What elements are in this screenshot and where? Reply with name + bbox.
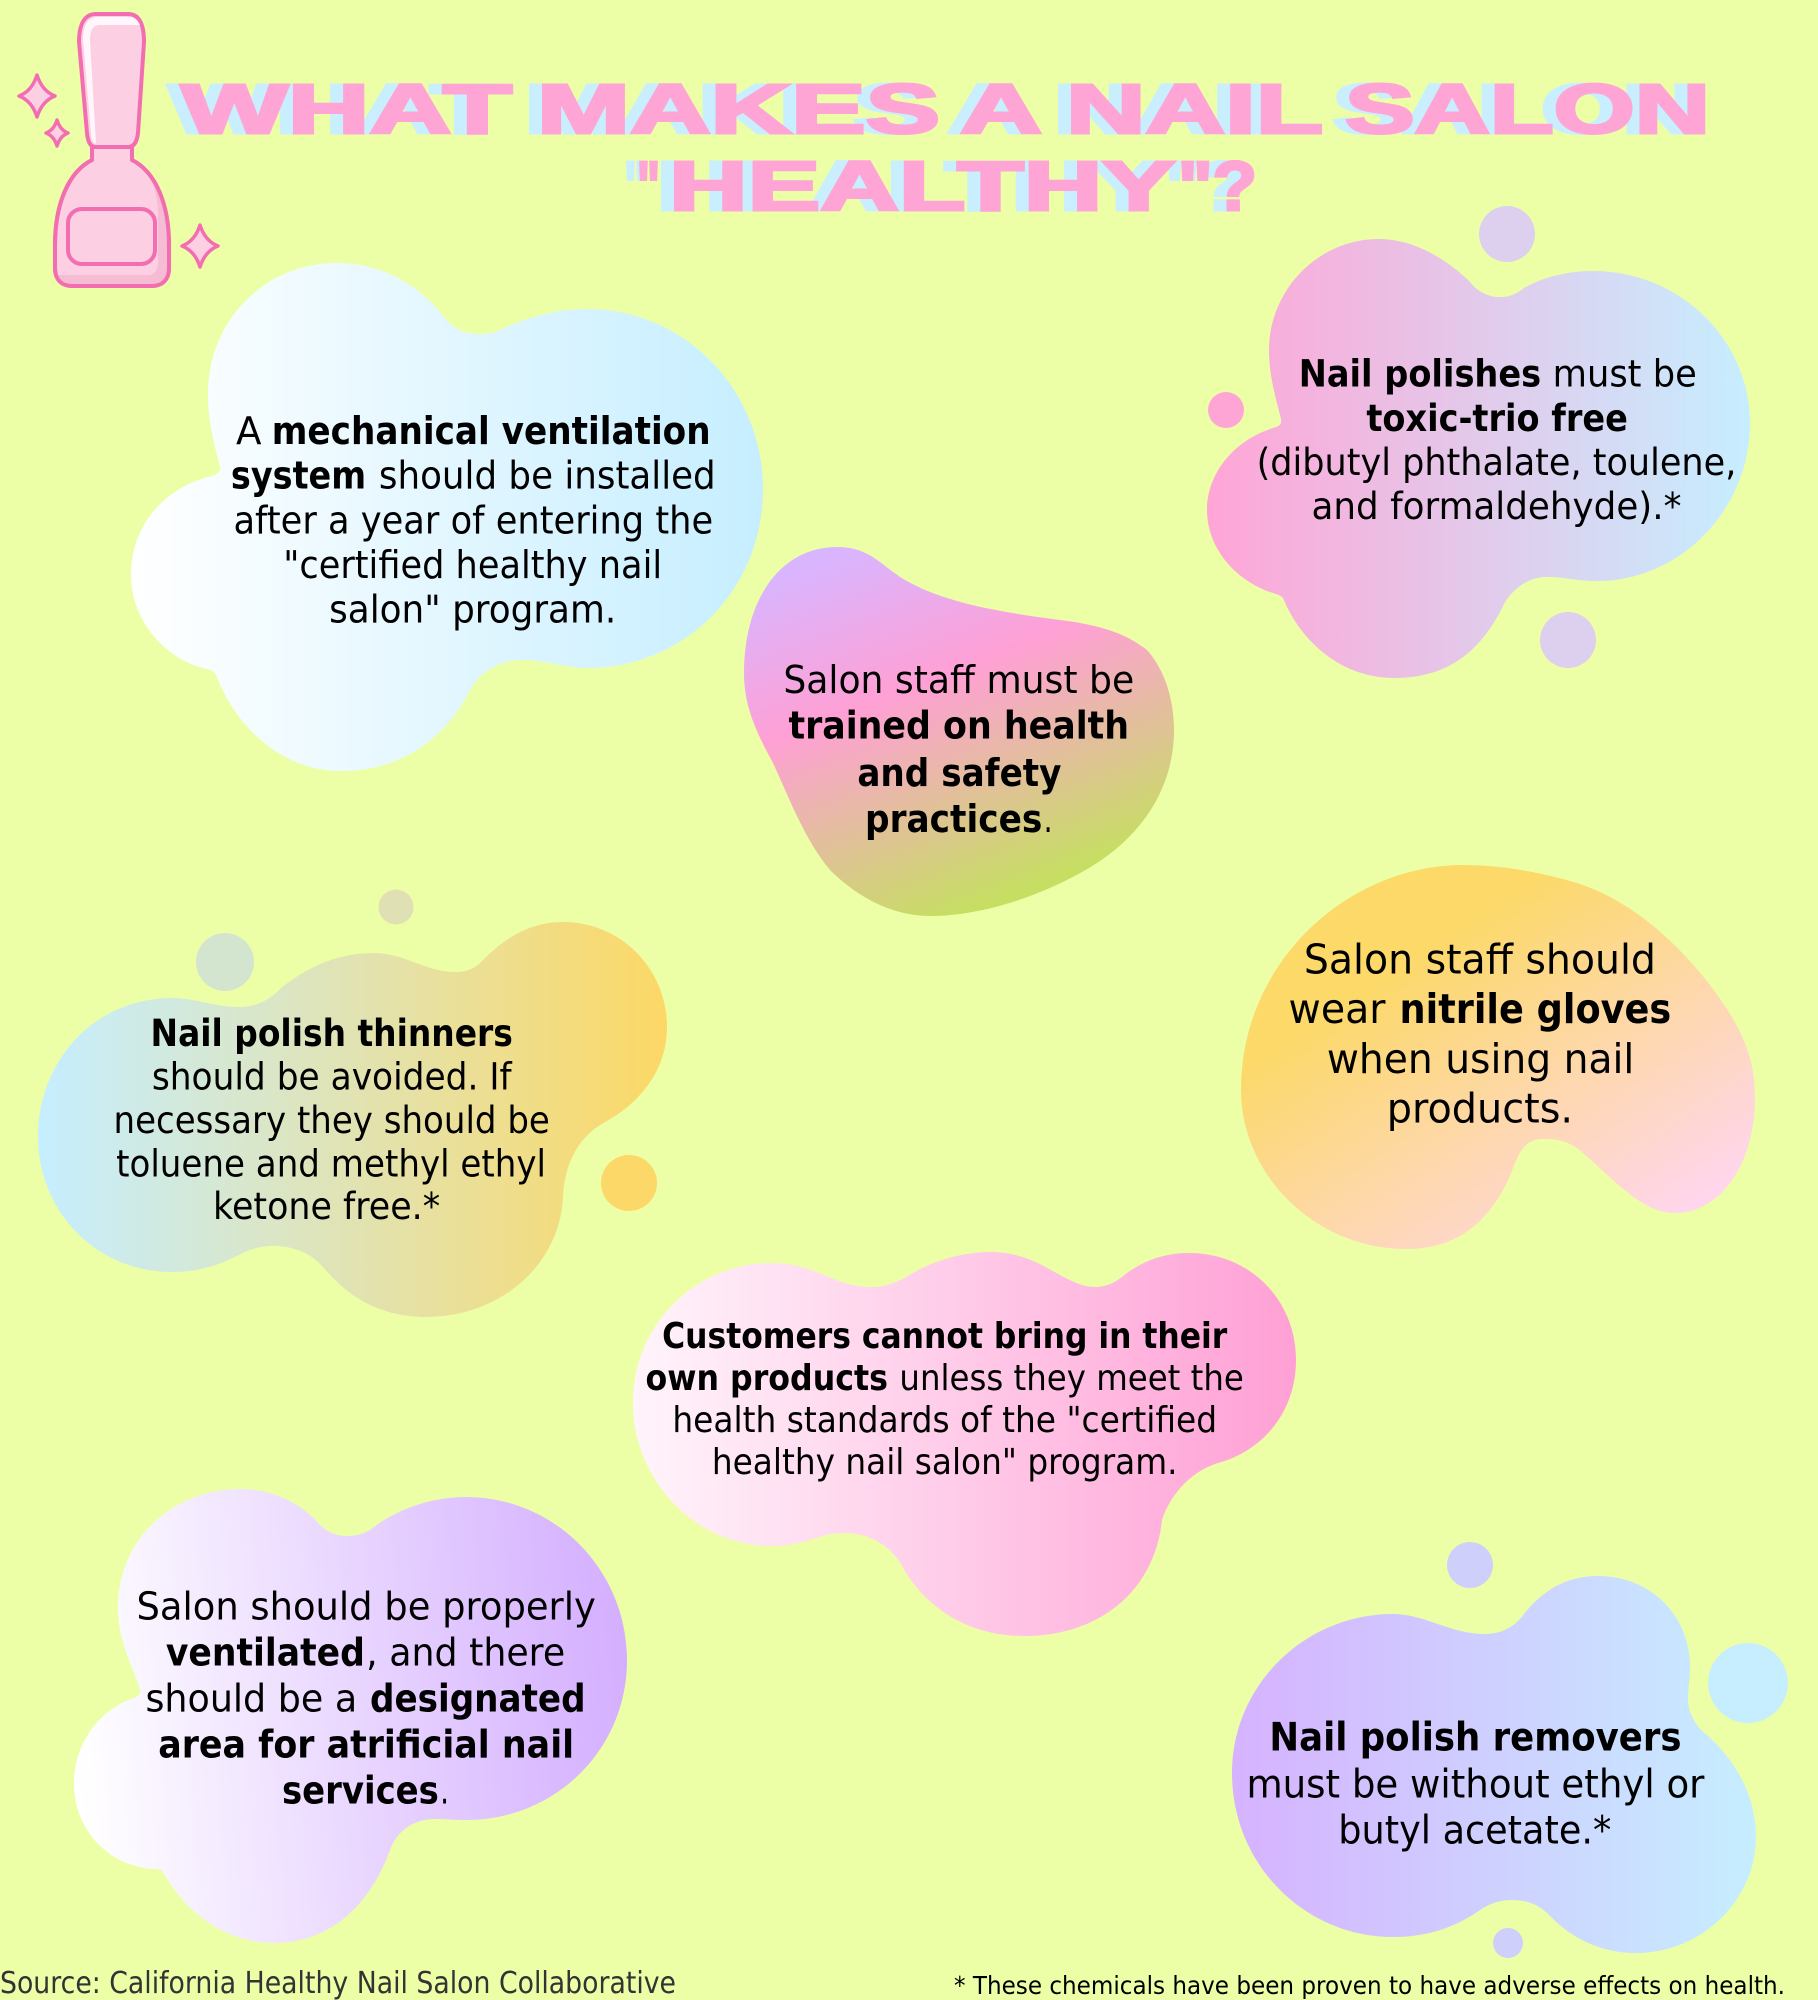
panel: nail polish removers xyxy=(1232,1542,1788,1958)
panel: nail polish thinners xyxy=(38,890,667,1317)
text: nitrile gloves: wear xyxy=(1289,985,1386,1033)
text: staff training: . xyxy=(1044,797,1053,842)
text: nail polish thinners: toluene and methyl ethyl xyxy=(116,1142,546,1185)
text: nail polish removers: butyl acetate.* xyxy=(1338,1808,1611,1854)
text: staff training: Salon staff must be xyxy=(783,658,1134,703)
icon: sparkle small left xyxy=(46,120,68,146)
text: customer products xyxy=(646,1316,1244,1483)
text: ventilated designated area: should be a xyxy=(145,1676,357,1721)
text: mechanical ventilation: system xyxy=(231,454,366,499)
text: nail polish thinners xyxy=(114,1012,550,1228)
text: nail polish thinners: necessary they should be xyxy=(114,1099,550,1142)
text: ventilated designated area: designated xyxy=(370,1676,586,1721)
text: nail polish removers: must be without ethyl or xyxy=(1246,1762,1705,1808)
text: mechanical ventilation: salon" program. xyxy=(329,588,616,633)
text: toxic-trio free polishes: must be xyxy=(1553,353,1697,396)
text: mechanical ventilation xyxy=(231,409,716,633)
text: nail polish removers xyxy=(1246,1714,1705,1854)
text: customer products: health standards of the "certified xyxy=(672,1400,1217,1441)
text: nitrile gloves: Salon staff should xyxy=(1304,935,1656,983)
text: ventilated designated area: area for atrificial nail xyxy=(158,1722,574,1767)
text: ventilated designated area xyxy=(137,1585,596,1813)
text: mechanical ventilation: "certified healthy nail xyxy=(283,543,662,588)
text: mechanical ventilation: A xyxy=(236,409,262,454)
title: NAIL xyxy=(1053,70,1310,148)
title: WHAT xyxy=(168,70,499,148)
text: mechanical ventilation: should be installed xyxy=(379,454,716,499)
text: ventilated designated area: , and there xyxy=(366,1631,565,1676)
text: toxic-trio free polishes: Nail polishes xyxy=(1299,353,1541,396)
text: ventilated designated area: services xyxy=(282,1768,439,1813)
text: customer products: unless they meet the xyxy=(899,1358,1244,1399)
text: ventilated designated area: Salon should be properly xyxy=(137,1585,596,1630)
title: SALON xyxy=(1345,70,1710,148)
title: HEALTHY xyxy=(669,147,1175,225)
title: " xyxy=(637,147,660,225)
text: ventilated designated area: ventilated xyxy=(166,1631,365,1676)
title: MAKES xyxy=(524,70,927,148)
source note: Source: California Healthy Nail Salon Collaborative xyxy=(0,1966,676,2000)
text: nail polish thinners: Nail polish thinners xyxy=(151,1012,513,1055)
text: customer products: Customers cannot bring in their xyxy=(662,1316,1228,1357)
title: HEALTHY xyxy=(656,147,1162,225)
title: MAKES xyxy=(537,70,940,148)
text: staff training: practices xyxy=(865,797,1042,842)
panel: nitrile gloves xyxy=(1241,865,1755,1249)
text: toxic-trio free polishes: (dibutyl phthalate, toulene, xyxy=(1257,441,1736,484)
panel: mechanical ventilation xyxy=(131,263,763,771)
title: A xyxy=(960,70,1042,148)
text: staff training: trained on health xyxy=(788,704,1129,749)
icon: sparkle right xyxy=(182,225,218,267)
text: toxic-trio free polishes: toxic-trio free xyxy=(1366,397,1628,440)
title: " xyxy=(624,147,647,225)
title: WHAT xyxy=(181,70,512,148)
title: "? xyxy=(1178,147,1257,225)
text: mechanical ventilation: after a year of entering the xyxy=(233,498,713,543)
title: SALON xyxy=(1332,70,1697,148)
title: NAIL xyxy=(1066,70,1323,148)
icon: sparkle large left xyxy=(19,75,55,117)
title xyxy=(168,70,1710,225)
text: nitrile gloves: products. xyxy=(1387,1085,1573,1133)
text: customer products: healthy nail salon" program. xyxy=(712,1442,1178,1483)
text: nail polish removers: Nail polish removers xyxy=(1269,1714,1681,1760)
panel: customer products xyxy=(633,1252,1296,1636)
text: ventilated designated area: . xyxy=(440,1768,449,1813)
title: A xyxy=(947,70,1029,148)
text: mechanical ventilation: mechanical ventilation xyxy=(272,409,711,454)
text: nail polish thinners: ketone free.* xyxy=(213,1185,440,1228)
text: nitrile gloves xyxy=(1289,935,1671,1133)
title: "? xyxy=(1165,147,1244,225)
text: staff training xyxy=(783,658,1134,842)
panel: staff training xyxy=(744,547,1174,916)
text: toxic-trio free polishes: and formaldehyde).* xyxy=(1312,485,1681,528)
panel: toxic-trio free polishes xyxy=(1207,206,1750,678)
icon: nail polish bottle xyxy=(50,14,175,295)
text: staff training: and safety xyxy=(857,751,1062,796)
text: nail polish thinners: should be avoided. If xyxy=(152,1056,513,1099)
text: nitrile gloves: nitrile gloves xyxy=(1400,985,1671,1033)
panel: ventilated designated area xyxy=(74,1489,627,1943)
text: nitrile gloves: when using nail xyxy=(1327,1035,1634,1083)
text: toxic-trio free polishes xyxy=(1257,353,1736,528)
text: customer products: own products xyxy=(646,1358,888,1399)
